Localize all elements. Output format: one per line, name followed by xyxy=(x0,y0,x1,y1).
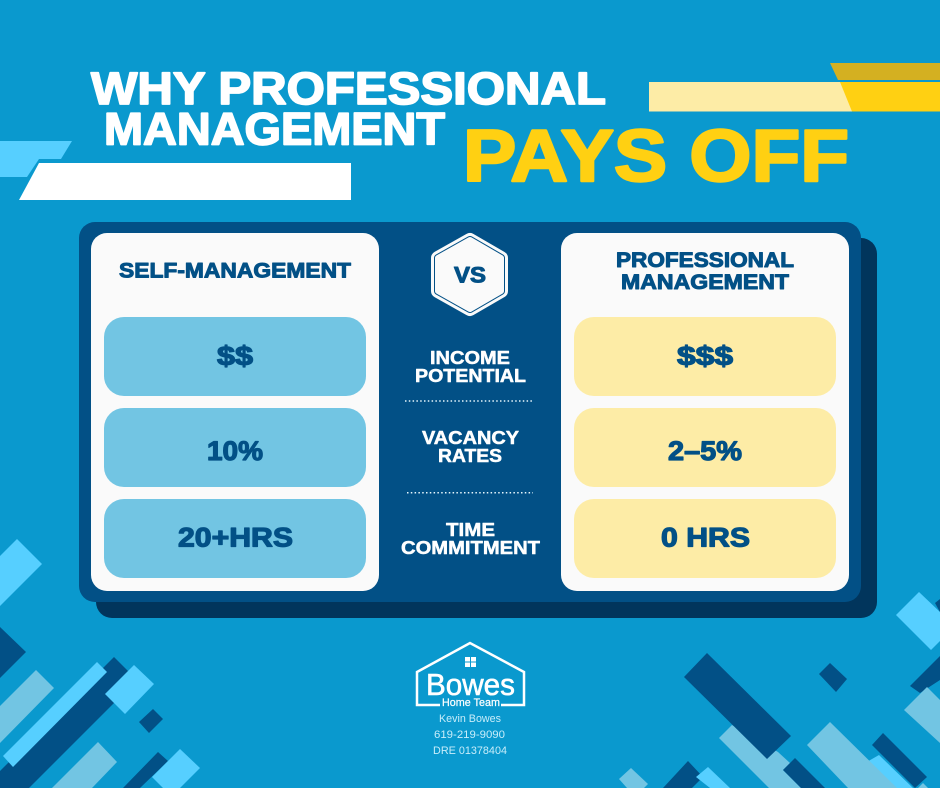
row label: vacancy rates: RATES xyxy=(438,446,502,466)
column: self-management: 10% xyxy=(207,436,263,466)
vs badge xyxy=(438,240,501,309)
contact details xyxy=(433,713,507,757)
row label: income potential: INCOME xyxy=(430,348,510,368)
column: professional management: MANAGEMENT xyxy=(621,271,789,294)
banner: top right yellow bars xyxy=(649,63,940,112)
column: self-management: 20+HRS xyxy=(178,522,293,552)
title xyxy=(91,63,849,197)
row label: income potential: POTENTIAL xyxy=(415,366,526,386)
column: self-management xyxy=(91,233,379,591)
row label: time commitment xyxy=(401,520,540,558)
logo: Bowes Home Team: Home Team xyxy=(442,697,500,709)
comparison panel xyxy=(79,222,877,618)
contact details: Kevin Bowes xyxy=(439,713,501,725)
icon: house window xyxy=(465,657,476,667)
row label: vacancy rates: VACANCY xyxy=(422,428,519,448)
row label: time commitment: COMMITMENT xyxy=(401,538,540,558)
logo: Bowes Home Team: Bowes xyxy=(426,667,515,702)
banner: left white bar xyxy=(0,141,351,200)
column: professional management: $$$ xyxy=(677,341,733,371)
row label: vacancy rates xyxy=(422,428,519,466)
column: professional management xyxy=(561,233,849,591)
contact details: DRE 01378404 xyxy=(433,745,507,757)
column: professional management: PROFESSIONAL xyxy=(616,249,794,272)
row label: time commitment: TIME xyxy=(446,520,495,540)
title: MANAGEMENT xyxy=(104,104,445,154)
title: WHY PROFESSIONAL xyxy=(91,63,606,114)
column: professional management: 0 HRS xyxy=(661,522,750,552)
column: self-management: $$ xyxy=(217,341,253,371)
decorative shapes: bottom left xyxy=(0,539,200,788)
column: self-management: SELF-MANAGEMENT xyxy=(119,260,351,282)
contact details: 619-219-9090 xyxy=(434,729,505,741)
row label: income potential xyxy=(415,348,526,386)
column: professional management: 2–5% xyxy=(668,436,742,466)
title: PAYS OFF xyxy=(463,116,849,197)
logo: Bowes Home Team xyxy=(417,643,524,709)
vs badge: VS xyxy=(454,262,486,288)
decorative shapes: bottom right xyxy=(619,592,940,788)
